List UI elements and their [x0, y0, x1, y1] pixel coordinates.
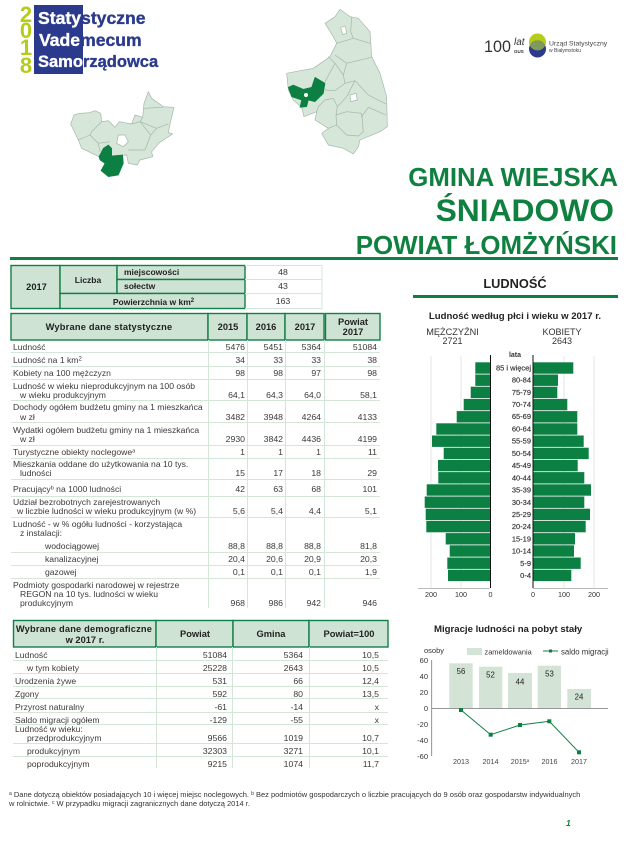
demographic table header	[14, 620, 388, 647]
age labels: 80-84	[512, 376, 531, 384]
table rows: 5364	[302, 342, 321, 352]
table header: 2015	[218, 322, 238, 332]
demographic table rows: 9566	[208, 733, 227, 743]
chart: migracje ludności: osoby	[424, 646, 444, 655]
axis labels: 100	[455, 590, 467, 599]
table rows: na 1000 ludności	[54, 484, 121, 494]
demographic table rows: 10,5	[362, 663, 379, 673]
table rows: 97	[311, 368, 321, 378]
table rows: 2	[78, 356, 82, 362]
x axis labels: 2016	[542, 757, 558, 766]
table rows: 5,4	[271, 506, 283, 516]
table rows: 942	[306, 598, 321, 608]
demographic table rows: 80	[293, 689, 303, 699]
table header: Powiat	[338, 317, 368, 327]
panel: liczba miejscowości, sołectw, powierzchnia: 2017	[26, 282, 47, 292]
demographic table rows: -129	[210, 715, 227, 725]
x axis labels: 2015	[511, 757, 527, 766]
table rows: 20,3	[360, 554, 377, 564]
table header: 2016	[256, 322, 276, 332]
demographic table header: Gmina	[257, 629, 286, 639]
demographic table rows: 9215	[208, 759, 227, 769]
bars: 53	[545, 670, 554, 678]
x axis labels: 2013	[453, 757, 469, 766]
bars: 24	[575, 692, 584, 702]
demographic table header: w 2017 r.	[65, 635, 104, 645]
x axis labels: 2017	[571, 757, 587, 766]
axis labels: 100	[558, 590, 570, 599]
table rows: Kobiety na 100 mężczyzn	[13, 368, 111, 378]
table rows: Podmioty gospodarki narodowej w rejestrze	[13, 580, 179, 590]
demographic table rows: 51084	[203, 650, 227, 660]
table rows: 2930	[226, 434, 245, 444]
table rows: 34	[235, 355, 245, 365]
logos: 100 lat GUS and Urząd Statystyczny w Białymstoku: GUS	[514, 49, 524, 54]
map: województwo podlaskie	[287, 9, 387, 154]
table header	[11, 314, 380, 340]
age labels: 5-9	[520, 559, 531, 568]
demographic table header: Powiat=100	[324, 629, 374, 639]
table rows: 5476	[226, 342, 245, 352]
y axis: 60	[420, 656, 428, 665]
age labels: 30-34	[512, 498, 531, 507]
table rows: 946	[362, 598, 377, 608]
table rows: 4264	[302, 412, 321, 422]
panel: liczba miejscowości, sołectw, powierzchnia: 43	[278, 281, 288, 291]
demographic table rows: 66	[293, 676, 303, 686]
table rows: Wydatki ogółem budżetu gminy na 1 mieszkańca	[13, 425, 199, 435]
table rows: 33	[311, 355, 321, 365]
logos: 100 lat GUS and Urząd Statystyczny w Białymstoku: w Białymstoku	[549, 48, 581, 54]
age labels	[496, 364, 531, 580]
table rows: 0,1	[309, 567, 321, 577]
demographic table rows: Urodzenia żywe	[15, 676, 76, 686]
panel: liczba miejscowości, sołectw, powierzchnia: miejscowości	[124, 267, 179, 277]
table rows: Turystyczne obiekty noclegowe	[13, 447, 132, 457]
logo: Statystyczne Vademecum Samorządowca 2018	[20, 2, 159, 78]
age labels: 25-29	[512, 510, 531, 519]
table rows: 38	[367, 355, 377, 365]
table: wybrane dane demograficzne	[13, 620, 388, 769]
table rows: 17	[273, 468, 283, 478]
age labels: 0-4	[520, 571, 531, 580]
table rows: w liczbie ludności w wieku produkcyjnym (w %)	[16, 506, 196, 516]
table rows: w wieku produkcyjnym	[19, 390, 106, 400]
table rows: 64,1	[228, 390, 245, 400]
table rows: 20,4	[228, 554, 245, 564]
demographic table header: Wybrane dane demograficzne	[16, 624, 152, 634]
table rows: 98	[367, 368, 377, 378]
table rows: 968	[230, 598, 245, 608]
panel: liczba miejscowości, sołectw, powierzchnia: sołectw	[124, 281, 156, 291]
footnotes	[8, 790, 580, 808]
demographic table rows: 12,4	[362, 676, 379, 686]
table rows: REGON na 10 tys. ludności w wieku	[20, 589, 158, 599]
chart: migracje ludności	[417, 624, 609, 766]
demographic table rows: 2643	[284, 663, 303, 673]
table rows: 29	[367, 468, 377, 478]
table rows: 33	[273, 355, 283, 365]
table: wybrane dane statystyczne	[11, 314, 380, 608]
table rows: z instalacji:	[20, 528, 62, 538]
table rows: Ludność - w % ogółu ludności - korzystająca	[13, 519, 182, 529]
logo: Statystyczne Vademecum Samorządowca 2018: 0	[20, 18, 32, 43]
table rows: 986	[268, 598, 283, 608]
table rows: 0,1	[271, 567, 283, 577]
demographic table rows: Ludność w wieku:	[15, 724, 83, 734]
y axis: -40	[417, 736, 428, 745]
age labels: 15-19	[512, 534, 531, 544]
table rows	[13, 342, 377, 608]
demographic table rows: x	[375, 715, 380, 725]
logo: Statystyczne Vademecum Samorządowca 2018: 8	[20, 53, 32, 78]
demographic table rows: 1074	[284, 759, 303, 769]
demographic table rows: Zgony	[15, 689, 40, 699]
bars: 56	[457, 667, 465, 676]
demographic table rows: w tym kobiety	[26, 663, 80, 673]
demographic table rows	[15, 650, 380, 769]
panel: liczba miejscowości, sołectw, powierzchnia: 48	[278, 267, 288, 277]
footnotes: W przypadku migracji zagranicznych dane dotyczą 2014 r.	[54, 799, 250, 808]
logos: 100 lat GUS and Urząd Statystyczny w Białymstoku: Urząd Statystyczny	[549, 40, 608, 48]
line: saldo migracji	[459, 708, 581, 754]
table rows: 63	[273, 484, 283, 494]
age labels: 20-24	[512, 522, 531, 531]
demographic table rows: produkcyjnym	[27, 746, 80, 756]
age labels: 60-64	[512, 424, 531, 434]
age labels: 70-74	[512, 400, 531, 409]
axis labels: 0	[531, 590, 535, 599]
logo: Statystyczne Vademecum Samorządowca 2018: 1	[20, 35, 32, 60]
table rows: 18	[311, 468, 321, 478]
logos: 100 lat GUS and Urząd Statystyczny w Białymstoku: lat	[514, 37, 526, 48]
table rows: 58,1	[360, 390, 377, 400]
table rows: 1,9	[365, 567, 377, 577]
table rows: w zł	[19, 412, 35, 422]
table rows: 20,6	[266, 554, 283, 564]
y axis	[417, 656, 428, 761]
footnotes: a	[9, 791, 12, 797]
table rows: kanalizacyjnej	[45, 554, 99, 564]
demographic table rows: -61	[214, 702, 227, 712]
demographic table rows: -55	[290, 715, 303, 725]
footnotes: w rolnictwie.	[9, 799, 50, 808]
y axis: 0	[424, 704, 428, 713]
logo: Statystyczne Vademecum Samorządowca 2018: Vademecum	[39, 30, 142, 50]
age labels: 75-79	[512, 388, 531, 397]
demographic table header: Powiat	[180, 629, 210, 639]
table rows: b	[51, 486, 54, 492]
table rows: 11	[368, 447, 377, 457]
demographic table rows: przedprodukcyjnym	[27, 733, 102, 743]
table rows: wodociągowej	[44, 541, 99, 551]
age labels: 85 i więcej	[496, 364, 531, 372]
footnotes: b	[251, 791, 254, 797]
table rows: 88,8	[304, 541, 321, 551]
logo: Statystyczne Vademecum Samorządowca 2018: Samorządowca	[38, 53, 159, 71]
legend: saldo migracji	[561, 648, 609, 656]
demographic table rows: Saldo migracji ogółem	[15, 715, 100, 725]
table header: 2017	[343, 327, 363, 337]
table rows: 42	[235, 484, 245, 494]
chart: population pyramid: 2721	[442, 336, 463, 346]
table rows: Dochody ogółem budżetu gminy na 1 mieszkańca	[13, 402, 203, 412]
demographic table rows: 592	[212, 689, 227, 699]
table rows: ludności	[20, 468, 52, 478]
footnotes: Bez podmiotów gospodarczych o liczbie pracujących do 9 osób oraz gospodarstw indywidualnych	[254, 790, 580, 799]
table rows: 81,8	[360, 541, 377, 551]
table rows: Ludność w wieku nieprodukcyjnym na 100 osób	[13, 381, 195, 391]
table rows: 88,8	[266, 541, 283, 551]
table rows: 101	[362, 484, 377, 494]
table rows: Udział bezrobotnych zarejestrowanych	[13, 497, 160, 507]
table rows: 98	[235, 368, 245, 378]
demographic table rows: 13,5	[362, 689, 379, 699]
demographic table rows: 11,7	[363, 759, 379, 769]
chart: population pyramid: Ludność według płci i wieku w 2017 r.	[429, 311, 601, 322]
table rows: Mieszkania oddane do użytkowania na 10 tys.	[13, 459, 188, 469]
age labels: 35-39	[512, 486, 531, 494]
y axis: -20	[417, 720, 428, 729]
demographic table rows: Przyrost naturalny	[15, 702, 85, 712]
panel: liczba miejscowości, sołectw, powierzchnia: 163	[276, 296, 290, 306]
legend: zameldowania	[484, 648, 533, 656]
table rows: 4133	[358, 412, 377, 422]
demographic table rows: -14	[290, 702, 303, 712]
table rows: 15	[235, 468, 245, 478]
bars: 52	[486, 670, 495, 680]
table rows: 4199	[358, 434, 377, 444]
demographic table rows: poprodukcyjnym	[27, 759, 90, 769]
axis labels	[425, 590, 600, 599]
table rows: gazowej	[45, 567, 77, 577]
footnotes: Dane dotyczą obiektów posiadających 10 i więcej miejsc noclegowych.	[12, 790, 251, 799]
bars	[449, 663, 591, 708]
age labels: 65-69	[512, 412, 531, 421]
demographic table rows: 5364	[284, 650, 303, 660]
title: gmina, powiat: GMINA WIEJSKA	[408, 164, 618, 192]
table rows: 3842	[264, 434, 283, 444]
bars: 44	[516, 678, 525, 686]
heading: ludność: LUDNOŚĆ	[483, 276, 547, 291]
female bars	[533, 362, 591, 581]
map: powiat łomżyński	[71, 92, 174, 177]
table rows: Ludność na 1 km	[13, 355, 78, 365]
age labels: 45-49	[512, 461, 531, 470]
page number: 1	[566, 818, 571, 828]
table rows: 98	[273, 368, 283, 378]
table rows: Pracujący	[13, 484, 51, 494]
table rows: w zł	[19, 434, 35, 444]
chart: migracje ludności: Migracje ludności na pobyt stały	[434, 624, 583, 635]
table rows: 4,4	[309, 506, 321, 516]
table rows: 5,6	[233, 506, 245, 516]
logos: 100 lat GUS and Urząd Statystyczny w Białymstoku: 100	[484, 37, 511, 56]
chart: population pyramid: 2643	[552, 336, 572, 346]
table rows: produkcyjnym	[20, 598, 73, 608]
table rows: 1	[278, 447, 283, 457]
y axis: 20	[420, 688, 428, 697]
table rows: 64,0	[304, 390, 321, 400]
title: gmina, powiat: ŚNIADOWO	[436, 192, 614, 228]
x axis labels	[453, 757, 587, 766]
age labels: 10-14	[512, 546, 531, 556]
demographic table rows: x	[375, 702, 380, 712]
age labels: 55-59	[512, 436, 531, 446]
male bars	[425, 362, 490, 581]
logos: 100 lat GUS and Urząd Statystyczny w Białymstoku	[484, 34, 608, 58]
table rows: Ludność	[13, 342, 46, 352]
logo: Statystyczne Vademecum Samorządowca 2018: 2	[20, 2, 32, 27]
table rows: 64,3	[266, 390, 283, 400]
title: gmina, powiat	[356, 164, 618, 260]
table rows: 4436	[302, 434, 321, 444]
chart: population pyramid	[418, 311, 608, 599]
panel: liczba miejscowości, sołectw, powierzchnia: Powierzchnia w km	[113, 297, 191, 307]
y axis: -60	[417, 752, 428, 761]
panel: liczba miejscowości, sołectw, powierzchnia: 2	[191, 298, 195, 304]
demographic table rows: Ludność	[15, 650, 48, 660]
demographic table rows: 10,1	[362, 746, 379, 756]
axis labels: 0	[488, 590, 492, 599]
table header: 2017	[295, 322, 315, 332]
demographic table rows: 1019	[284, 733, 303, 743]
age labels: 40-44	[512, 474, 531, 482]
table rows: 3948	[264, 412, 283, 422]
table rows: 1	[316, 447, 321, 457]
chart: population pyramid: MĘŻCZYŹNI	[426, 327, 479, 337]
table rows: 5,1	[365, 506, 377, 516]
demographic table rows: 3271	[284, 746, 303, 756]
table header: Wybrane dane statystyczne	[46, 322, 172, 332]
table rows: a	[132, 448, 136, 454]
table rows: 51084	[353, 342, 377, 352]
logo: Statystyczne Vademecum Samorządowca 2018: Statystyczne	[38, 8, 146, 28]
title: gmina, powiat: POWIAT ŁOMŻYŃSKI	[356, 231, 617, 260]
chart: population pyramid: lata	[509, 352, 521, 359]
demographic table rows: 32303	[203, 746, 227, 756]
table rows: 3482	[226, 412, 245, 422]
axis labels: 200	[425, 590, 437, 599]
demographic table rows: 25228	[203, 663, 227, 673]
table rows: 88,8	[228, 541, 245, 551]
y axis: 40	[420, 672, 428, 681]
age labels: 50-54	[512, 449, 531, 458]
panel: liczba miejscowości, sołectw, powierzchnia: Liczba	[75, 275, 101, 285]
chart: population pyramid: KOBIETY	[542, 327, 582, 337]
table rows: 20,9	[304, 554, 321, 564]
axis labels: 200	[588, 590, 600, 599]
table rows: 68	[311, 484, 321, 494]
table rows: 5451	[264, 342, 283, 352]
heading: ludność	[413, 276, 618, 298]
footnotes: c	[52, 800, 55, 806]
panel: liczba miejscowości, sołectw, powierzchnia	[11, 265, 322, 309]
x axis labels: a	[527, 758, 530, 763]
table rows: 0,1	[233, 567, 245, 577]
demographic table rows: 531	[212, 676, 227, 686]
x axis labels: 2014	[482, 757, 498, 766]
demographic table rows: 10,7	[362, 733, 379, 743]
table rows: 1	[240, 447, 245, 457]
legend	[467, 648, 609, 656]
demographic table rows: 10,5	[362, 650, 379, 660]
